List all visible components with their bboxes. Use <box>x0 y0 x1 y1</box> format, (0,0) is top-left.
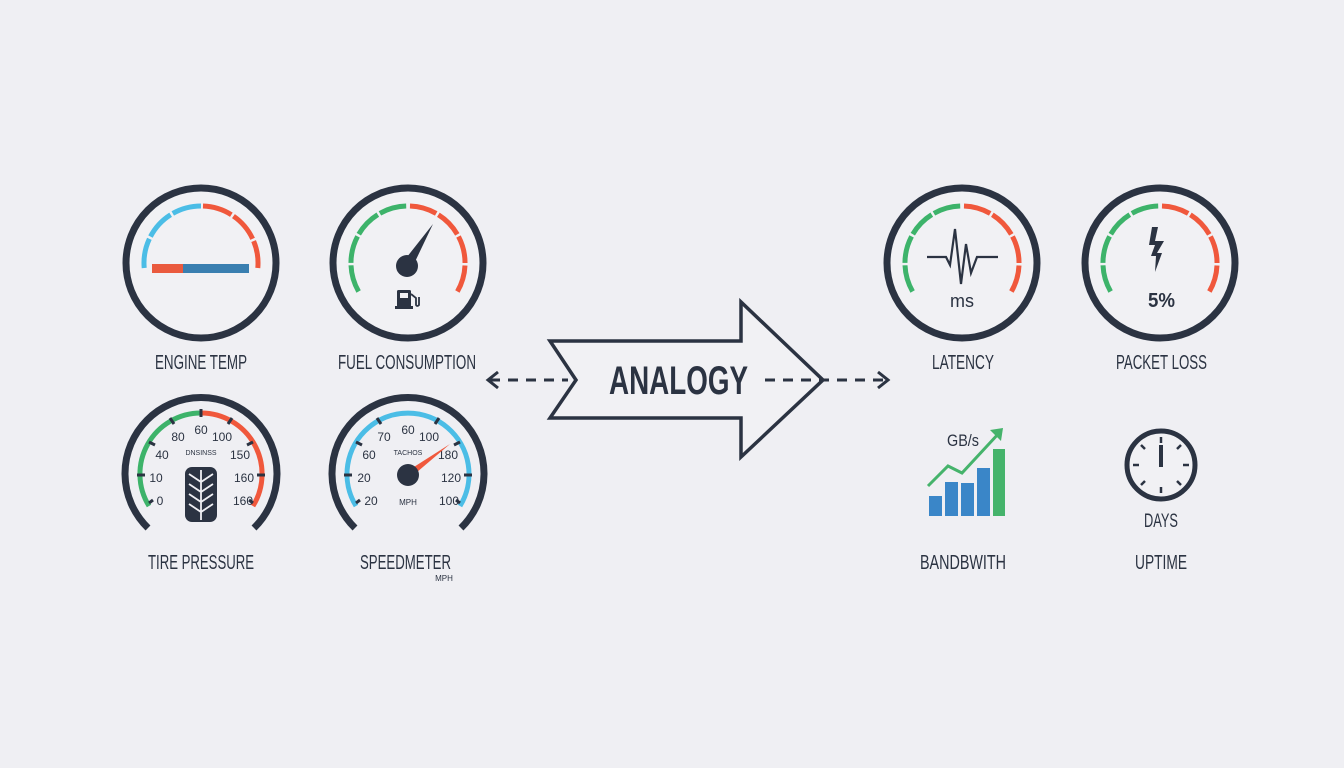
icon: waveform <box>927 229 998 284</box>
gauge: speedometer: 100 <box>439 494 459 508</box>
label: fuel consumption: FUEL CONSUMPTION <box>338 352 476 374</box>
icon: clock <box>1127 431 1195 532</box>
gauge: tire pressure: 10 <box>149 471 163 485</box>
gauge: tire pressure: 150 <box>230 448 250 462</box>
gauge: speedometer <box>332 398 484 528</box>
gauge: tire pressure: 160 <box>233 494 253 508</box>
icon: fuel pump <box>395 290 419 309</box>
gauge: tire pressure <box>125 398 277 528</box>
gauge: tire pressure: DNSINSS <box>185 450 217 457</box>
label: engine temp: ENGINE TEMP <box>155 352 247 374</box>
label: tire pressure: TIRE PRESSURE <box>148 552 254 574</box>
gauge: tire pressure: 80 <box>171 430 185 444</box>
needle <box>406 444 450 478</box>
gauge: speedometer: 180 <box>438 448 458 462</box>
gauge: speedometer: 20 <box>364 494 378 508</box>
gauge: speedometer: 60 <box>401 423 415 437</box>
gauge: tire pressure: 160 <box>234 471 254 485</box>
label: speedometer: SPEEDMETER <box>360 552 451 574</box>
gauge: tire pressure: 100 <box>212 430 232 444</box>
gauge: speedometer: 20 <box>357 471 371 485</box>
label: bandwidth: BANDBWITH <box>920 552 1006 574</box>
gauge: tire pressure: 60 <box>194 423 208 437</box>
icon: tire <box>185 467 217 522</box>
label: speedometer <box>360 552 453 583</box>
gauge: tire pressure: 0 <box>157 494 164 508</box>
label: speedometer: MPH <box>435 574 453 583</box>
gauge: fuel consumption <box>333 188 483 338</box>
gauge: speedometer: TACHOS <box>394 450 423 457</box>
icon: clock: DAYS <box>1144 511 1178 532</box>
gauge: latency <box>887 188 1037 338</box>
gauge: engine temp <box>126 188 276 338</box>
gauge: latency: ms <box>950 291 974 311</box>
label: latency: LATENCY <box>932 352 994 374</box>
chart: bandwidth <box>928 428 1005 516</box>
arrow: analogy <box>488 302 888 457</box>
label: packet loss: PACKET LOSS <box>1116 352 1207 374</box>
gauge: packet loss: 5% <box>1148 290 1175 312</box>
gauge: tire pressure: 40 <box>155 448 169 462</box>
gauge: speedometer: 70 <box>377 430 391 444</box>
label: uptime: UPTIME <box>1135 552 1187 574</box>
gauge: speedometer: 100 <box>419 430 439 444</box>
arrow: right dashed <box>765 372 888 388</box>
temperature bar <box>152 264 249 273</box>
gauge: speedometer: 60 <box>362 448 376 462</box>
icon: lightning <box>1149 227 1164 272</box>
gauge: speedometer: 120 <box>441 471 461 485</box>
chart: bandwidth: GB/s <box>947 431 979 450</box>
gauge: packet loss <box>1085 188 1235 338</box>
gauge: speedometer: MPH <box>399 498 417 507</box>
needle <box>403 224 433 268</box>
arrow: left dashed <box>488 372 568 388</box>
heading: analogy: ANALOGY <box>609 359 748 403</box>
